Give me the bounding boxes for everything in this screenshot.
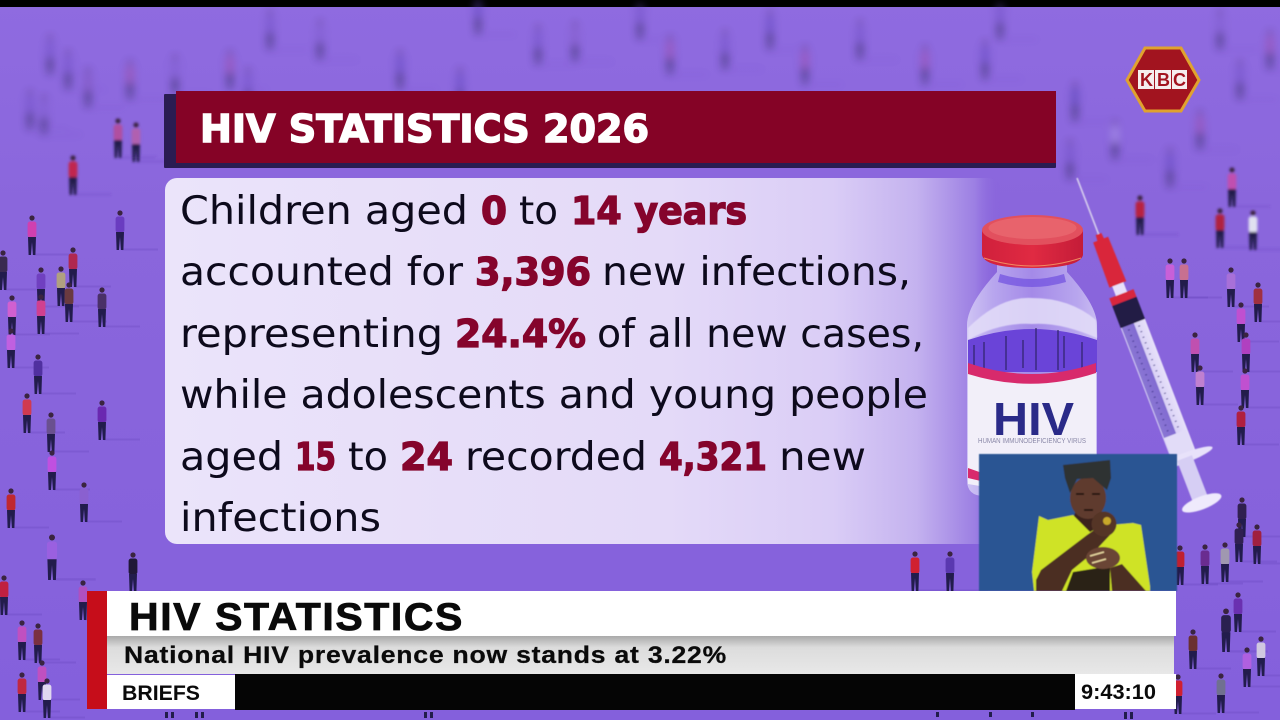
upper hand — [1092, 512, 1116, 536]
body text block: of all new cases, — [597, 312, 924, 357]
body text block: accounted for — [180, 250, 464, 295]
body text block: 4,321 — [659, 435, 767, 479]
subheadline strip — [107, 636, 1174, 674]
body text block — [180, 189, 928, 541]
dress — [1032, 515, 1150, 591]
KBC logo: K — [1140, 70, 1153, 90]
body text block: while adolescents and young people — [180, 373, 928, 418]
foreground crowd left — [0, 210, 171, 718]
glass highlights — [968, 298, 1097, 340]
body text block: 0 — [481, 189, 507, 233]
blurred distant crowd — [26, 0, 1280, 189]
black crawl strip — [235, 674, 1075, 710]
mid-distance crowd — [69, 118, 1280, 251]
clock — [1075, 674, 1176, 709]
liquid — [968, 329, 1097, 372]
body text block: 15 — [295, 435, 336, 479]
headwrap — [1063, 460, 1111, 493]
body text block: infections — [180, 496, 381, 541]
other forearm — [1110, 564, 1146, 591]
body text block: representing — [180, 312, 443, 357]
body text block: to — [348, 435, 388, 480]
near forearm — [1036, 528, 1110, 591]
briefs label — [107, 675, 235, 709]
icon: HIV vial — [967, 215, 1097, 496]
icon: syringe — [1049, 167, 1232, 520]
panel: text card — [165, 178, 1000, 544]
body text block: to — [519, 189, 558, 234]
lower-third news ticker — [87, 591, 1176, 710]
lower hand — [1086, 547, 1120, 569]
red accent bar — [87, 591, 107, 709]
body text block: 14 years — [571, 189, 747, 233]
headline: HIV STATISTICS — [129, 596, 464, 639]
dark hem — [1066, 566, 1110, 591]
neck — [1074, 510, 1102, 532]
top black bar — [0, 0, 1280, 7]
face — [1070, 477, 1106, 519]
sign language interpreter — [979, 454, 1177, 591]
body text block: 24 — [400, 435, 453, 479]
icon: HIV vial: HIV — [993, 393, 1074, 445]
headline strip — [107, 591, 1176, 636]
body text block: 3,396 — [475, 250, 591, 294]
icon: HIV vial: HUMAN IMMUNODEFICIENCY VIRUS — [978, 438, 1086, 445]
lower-third news ticker: 9:43:10 — [1081, 681, 1156, 704]
heading: HIV STATISTICS 2026 — [200, 107, 649, 151]
body text block: aged — [180, 435, 283, 480]
lower-third news ticker: BRIEFS — [122, 682, 200, 705]
header banner — [164, 91, 1056, 168]
body text block: 24.4% — [455, 312, 586, 356]
cap — [982, 230, 1083, 268]
foreground crowd right — [911, 258, 1280, 714]
body text block: recorded — [465, 435, 647, 480]
body text block: Children aged — [180, 189, 468, 234]
KBC logo: B — [1157, 70, 1170, 90]
subheadline: National HIV prevalence now stands at 3.22% — [124, 642, 727, 669]
label — [968, 372, 1096, 490]
body text block: new infections, — [602, 250, 911, 295]
KBC logo — [1127, 48, 1199, 111]
feet below ticker — [165, 712, 1133, 719]
body text block: new — [779, 435, 866, 480]
KBC logo: C — [1173, 70, 1186, 90]
